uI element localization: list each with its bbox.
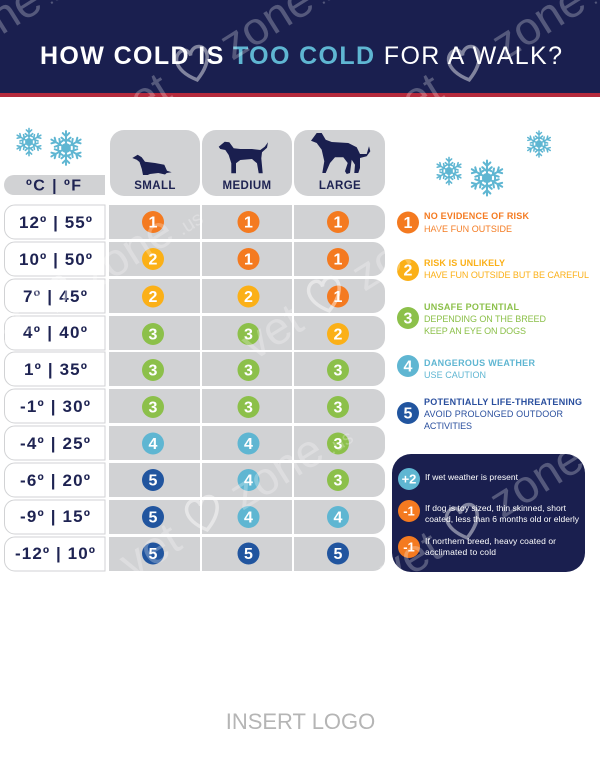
- rating circles: 3: [244, 326, 253, 344]
- rating circles: 5: [334, 546, 343, 563]
- rating circles: 4: [244, 472, 253, 490]
- row labels text: -6º | 20º: [20, 471, 90, 490]
- modifier: wet: [398, 468, 519, 490]
- icon: large dog: [311, 133, 370, 174]
- legend 3: UNSAFE POTENTIAL: [424, 302, 520, 312]
- insert logo text: INSERT LOGO: [226, 709, 375, 734]
- rating circles: 2: [334, 326, 343, 344]
- rating circles: 3: [244, 400, 253, 416]
- legend 3: KEEP AN EYE ON DOGS: [424, 326, 526, 336]
- rating circles: 4: [244, 510, 253, 526]
- legend 4: DANGEROUS WEATHER: [424, 358, 536, 368]
- legend 5: ACTIVITIES: [424, 421, 472, 431]
- modifier: small dog: -1: [403, 504, 415, 518]
- rating circles: 5: [149, 546, 158, 563]
- legend 2: RISK IS UNLIKELY: [424, 258, 505, 268]
- unit header: ºC | ºF: [26, 178, 81, 194]
- rating circles: [142, 211, 349, 564]
- legend 5: AVOID PROLONGED OUTDOOR: [424, 409, 564, 419]
- modifier: wet: +2: [402, 472, 416, 486]
- rating circles: 1: [334, 289, 343, 306]
- legend 3: DEPENDING ON THE BREED: [424, 314, 546, 324]
- legend 2: [397, 258, 589, 281]
- rating circles: 3: [149, 400, 158, 416]
- row labels text: 4º | 40º: [23, 323, 87, 342]
- modifier: northern breed: If northern breed, heavy coated or: [425, 536, 556, 546]
- modifier: wet: If wet weather is present: [425, 472, 519, 482]
- legend 4: 4: [404, 358, 413, 376]
- column header: small: [110, 130, 200, 196]
- rating circles: 1: [334, 214, 343, 232]
- legend 4: [397, 355, 536, 380]
- rating circles: 5: [149, 472, 158, 490]
- legend 1: NO EVIDENCE OF RISK: [424, 211, 530, 221]
- rating circles: 3: [149, 362, 158, 380]
- modifier: northern breed: acclimated to cold: [425, 547, 496, 557]
- rating circles: 3: [334, 436, 343, 453]
- rating circles: 4: [334, 510, 343, 526]
- rating circles: 3: [149, 326, 158, 344]
- legend 1: 1: [404, 215, 413, 232]
- legend 5: 5: [404, 406, 413, 422]
- rating circles: 3: [334, 362, 343, 380]
- rating circles: 3: [244, 362, 253, 380]
- panel: modifiers: [392, 454, 585, 572]
- legend 3: [397, 302, 546, 336]
- row labels text: [15, 213, 95, 563]
- rating circles: 5: [244, 546, 253, 563]
- rating circles: 2: [244, 289, 253, 306]
- row labels text: -4º | 25º: [20, 434, 90, 453]
- rating circles: 2: [149, 289, 158, 306]
- legend 3: 3: [404, 310, 413, 328]
- legend 1: HAVE FUN OUTSIDE: [424, 224, 512, 234]
- title: HOW COLD IS TOO COLD FOR A WALK?: [40, 42, 562, 70]
- modifier: northern breed: -1: [403, 540, 415, 554]
- icon: medium dog: [219, 142, 268, 173]
- column header: small: SMALL: [134, 180, 176, 192]
- column header: large: [294, 130, 385, 196]
- legend 4: USE CAUTION: [424, 370, 486, 380]
- rating circles: 3: [334, 472, 343, 490]
- rating circles: 3: [334, 400, 343, 416]
- rating circles: 4: [149, 436, 158, 453]
- row labels text: 12º | 55º: [19, 213, 92, 232]
- modifier: small dog: coated, less than 6 months old or elderly: [425, 514, 580, 524]
- rating circles: 1: [149, 214, 158, 232]
- row labels text: -12º | 10º: [15, 544, 95, 563]
- row label column: [4, 205, 105, 571]
- snowflakes left: [15, 128, 83, 165]
- rating circles: 2: [149, 252, 158, 268]
- legend 2: 2: [404, 262, 413, 280]
- row labels text: -1º | 30º: [20, 397, 90, 416]
- table cells: [109, 205, 385, 571]
- column header: medium: MEDIUM: [222, 180, 272, 192]
- icon: small dog: [132, 155, 172, 175]
- legend 2: HAVE FUN OUTSIDE BUT BE CAREFUL: [424, 270, 589, 280]
- header banner: [0, 0, 600, 97]
- row labels text: 1º | 35º: [24, 360, 87, 379]
- rating circles: 1: [334, 252, 343, 268]
- modifier: northern breed: [398, 536, 556, 558]
- row labels text: 7º | 45º: [23, 287, 87, 306]
- legend 5: [397, 397, 582, 431]
- column header: large: LARGE: [319, 180, 361, 192]
- rating circles: 4: [244, 436, 253, 453]
- modifier: small dog: If dog is toy sized, thin skinned, short: [425, 503, 567, 513]
- column header: medium: [202, 130, 292, 196]
- snowflakes right: [435, 131, 552, 196]
- rating circles: 1: [244, 214, 253, 232]
- legend 5: POTENTIALLY LIFE-THREATENING: [424, 397, 582, 407]
- row labels text: -9º | 15º: [20, 507, 90, 526]
- rating circles: 1: [244, 252, 253, 268]
- row labels text: 10º | 50º: [19, 250, 92, 269]
- legend 1: [397, 211, 530, 234]
- rating circles: 5: [149, 510, 158, 526]
- watermark: [0, 0, 600, 596]
- modifier: small dog: [398, 500, 580, 524]
- unit header: [4, 175, 105, 195]
